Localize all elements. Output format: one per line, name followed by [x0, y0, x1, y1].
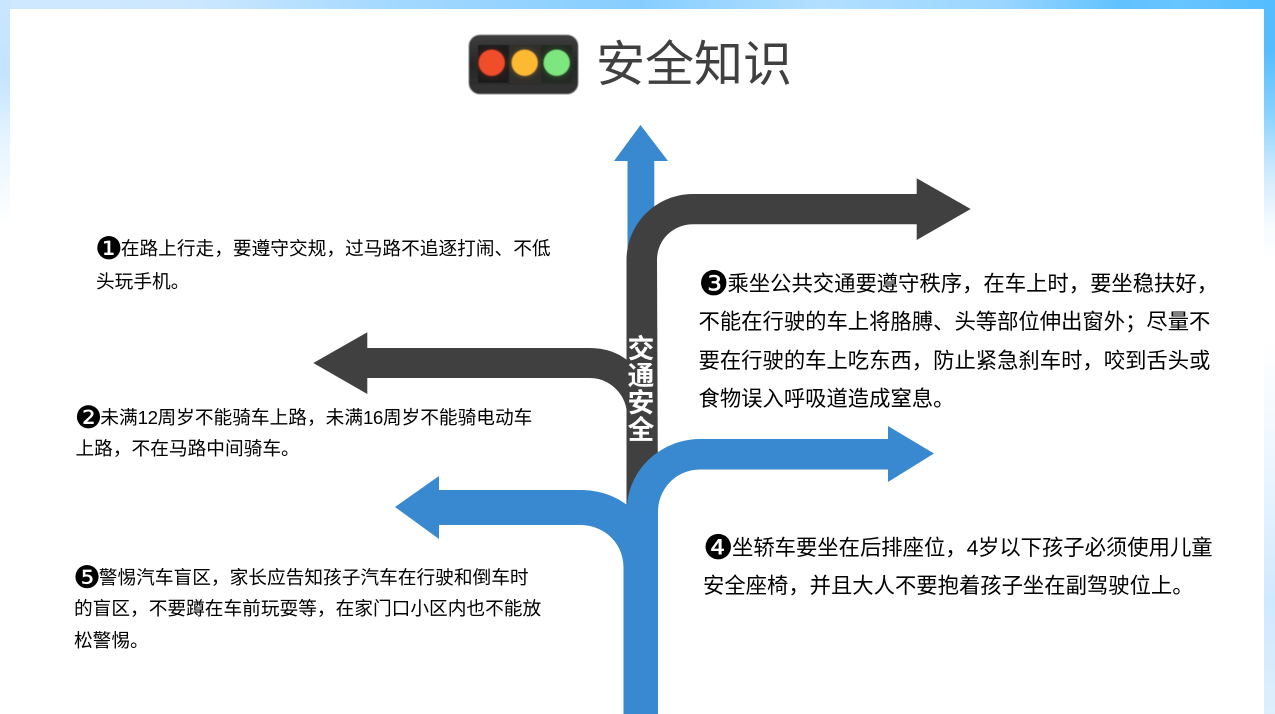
text block 5: 松警惕。 [74, 630, 149, 651]
text block 4: 安全座椅，并且大人不要抱着孩子坐在副驾驶位上。 [703, 574, 1194, 598]
icon: traffic light [468, 34, 579, 95]
text block 5: 的盲区，不要蹲在车前玩耍等，在家门口小区内也不能放 [74, 598, 541, 619]
stem label: 通 [628, 361, 654, 391]
text block 4: ❹ [703, 528, 733, 568]
background left edge [0, 0, 10, 714]
text block 2: 上路，不在马路中间骑车。 [76, 438, 300, 459]
stem label: 全 [628, 415, 654, 445]
text block 3: 乘坐公共交通要遵守秩序，在车上时，要坐稳扶好， [727, 272, 1218, 296]
text block 1: 在路上行走，要遵守交规，过马路不追逐打闹、不低 [121, 238, 551, 259]
arrow: dark left [313, 332, 640, 420]
text block 1: ❶ [95, 231, 123, 267]
text block 1: 头玩手机。 [96, 271, 189, 292]
text block 5: ❺ [73, 560, 101, 596]
text block 2: 未满12周岁不能骑车上路，未满16周岁不能骑电动车 [100, 407, 532, 428]
text block 5: 警惕汽车盲区，家长应告知孩子汽车在行驶和倒车时 [99, 567, 529, 588]
arrow: dark right with vertical stem [626, 178, 971, 510]
text block 3: 食物误入呼吸道造成窒息。 [698, 387, 954, 411]
text block 5 [73, 560, 541, 651]
stem label: 安 [628, 388, 654, 418]
text block 1 [95, 231, 551, 292]
text block 2 [74, 400, 532, 459]
arrow: blue left [395, 476, 640, 600]
text block 3: 不能在行驶的车上将胳膊、头等部位伸出窗外；尽量不 [698, 310, 1210, 334]
text block 4 [703, 528, 1213, 598]
text block 3: 要在行驶的车上吃东西，防止紧急刹车时，咬到舌头或 [698, 349, 1210, 373]
text block 2: ❷ [74, 400, 102, 436]
text block 4: 坐轿车要坐在后排座位，4岁以下孩子必须使用儿童 [732, 536, 1213, 560]
background right edge [1264, 0, 1275, 714]
stem label [628, 334, 654, 445]
text block 3: ❸ [698, 264, 729, 304]
stem label: 交 [628, 334, 654, 364]
text block 3 [698, 264, 1218, 411]
arrow: blue right with vertical stem [624, 426, 934, 714]
arrow: blue up [614, 125, 668, 260]
title: 安全知识 [596, 38, 792, 92]
